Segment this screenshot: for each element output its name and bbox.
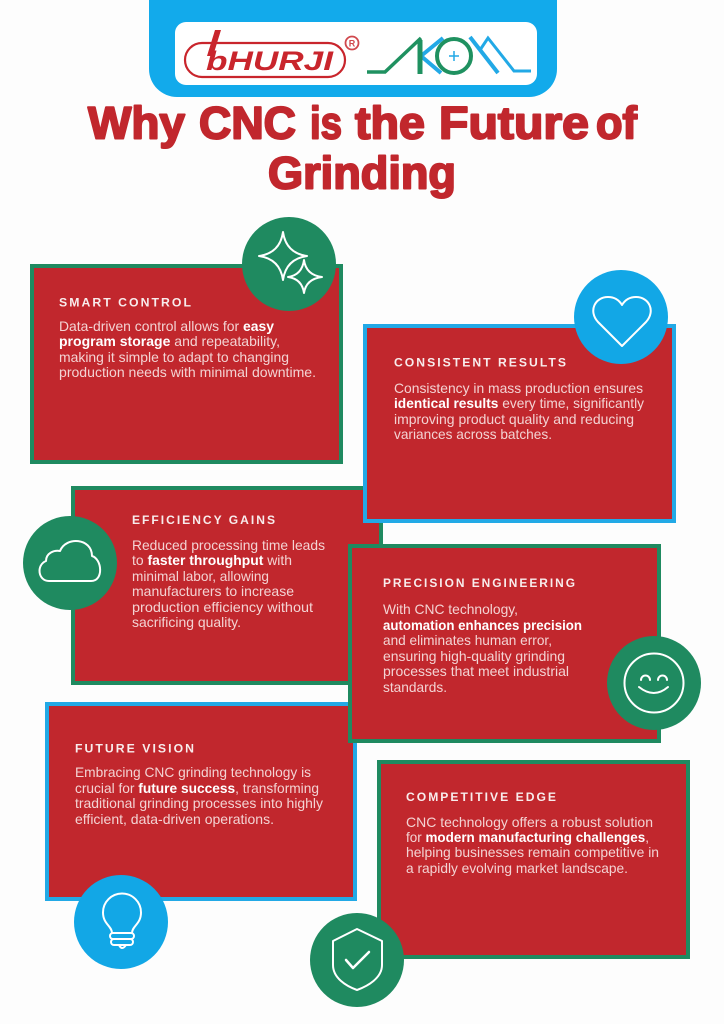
text: consistent results body: improving product quality and reducing [394, 411, 634, 427]
text: precision engineering body: and eliminates human error, [383, 632, 552, 648]
text: smart control body: making it simple to adapt to changing [59, 349, 289, 365]
panel: future vision [47, 704, 355, 899]
heading: consistent results: CONSISTENT RESULTS [394, 356, 568, 370]
text: efficiency gains body: minimal labor, allowing [132, 568, 269, 584]
title: CNC [199, 98, 296, 148]
icon: heart [574, 270, 668, 364]
text: precision engineering body: standards. [383, 679, 447, 695]
text: consistent results body: variances across batches. [394, 426, 552, 442]
icon: shield check [310, 913, 404, 1007]
text: efficiency gains body [132, 537, 325, 630]
text: consistent results body: Consistency in mass production ensures [394, 380, 643, 396]
text: competitive edge body: a rapidly evolving market landscape. [406, 860, 628, 876]
text: precision engineering body: automation enhances precision [383, 617, 582, 633]
header band with logos [149, 0, 557, 97]
icon: light bulb [74, 875, 168, 969]
logo: Bhurji [185, 30, 358, 77]
icon: smiley [607, 636, 701, 730]
text: competitive edge body [406, 814, 659, 876]
heading: efficiency gains: EFFICIENCY GAINS [132, 513, 277, 527]
text: precision engineering body [383, 601, 582, 695]
text: smart control body: Data-driven control allows for easy [59, 318, 274, 334]
text: precision engineering body: processes that meet industrial [383, 663, 569, 679]
logo: Bhurji: bHURJI [206, 46, 334, 76]
text: consistent results body [394, 380, 644, 442]
panel: smart control [32, 266, 341, 462]
text: efficiency gains body: Reduced processing time leads [132, 537, 325, 553]
heading: smart control: SMART CONTROL [59, 296, 193, 310]
text: future vision body: Embracing CNC grinding technology is [75, 764, 311, 780]
panel: precision engineering [350, 546, 659, 741]
text: future vision body [75, 764, 323, 827]
text: smart control body: program storage and repeatability, [59, 333, 280, 349]
panel: consistent results [365, 326, 674, 521]
text: competitive edge body: for modern manufacturing challenges, [406, 829, 649, 845]
icon: cloud [23, 516, 117, 610]
title: Grinding [268, 148, 456, 198]
title: Future [439, 98, 589, 148]
text: efficiency gains body: sacrificing quality. [132, 614, 241, 630]
title: of [596, 98, 638, 148]
text: efficiency gains body: to faster throughput with [132, 552, 292, 568]
text: future vision body: efficient, data-driven operations. [75, 811, 274, 827]
text: consistent results body: identical results every time, significantly [394, 395, 644, 411]
panel: efficiency gains [73, 488, 381, 683]
title: Why [88, 98, 185, 148]
heading: competitive edge: COMPETITIVE EDGE [406, 790, 558, 804]
title: is [310, 98, 342, 148]
heading: precision engineering: PRECISION ENGINEERING [383, 576, 577, 590]
text: future vision body: crucial for future success, transforming [75, 780, 319, 796]
icon: sparkles [242, 217, 336, 311]
panel: competitive edge [379, 762, 688, 957]
text: efficiency gains body: production efficiency without [132, 599, 313, 615]
text: competitive edge body: helping businesses remain competitive in [406, 844, 659, 860]
title: the [355, 98, 425, 148]
text: efficiency gains body: manufacturers to increase [132, 583, 294, 599]
text: competitive edge body: CNC technology offers a robust solution [406, 814, 653, 830]
text: precision engineering body: ensuring high-quality grinding [383, 648, 565, 664]
heading: future vision: FUTURE VISION [75, 742, 196, 756]
text: smart control body: production needs with minimal downtime. [59, 364, 316, 380]
logo: AKOM [367, 37, 531, 74]
text: smart control body [59, 318, 316, 380]
text: precision engineering body: With CNC technology, [383, 601, 518, 617]
logo: Bhurji: R [349, 38, 356, 48]
text: future vision body: traditional grinding processes into highly [75, 795, 323, 811]
title [88, 98, 638, 198]
